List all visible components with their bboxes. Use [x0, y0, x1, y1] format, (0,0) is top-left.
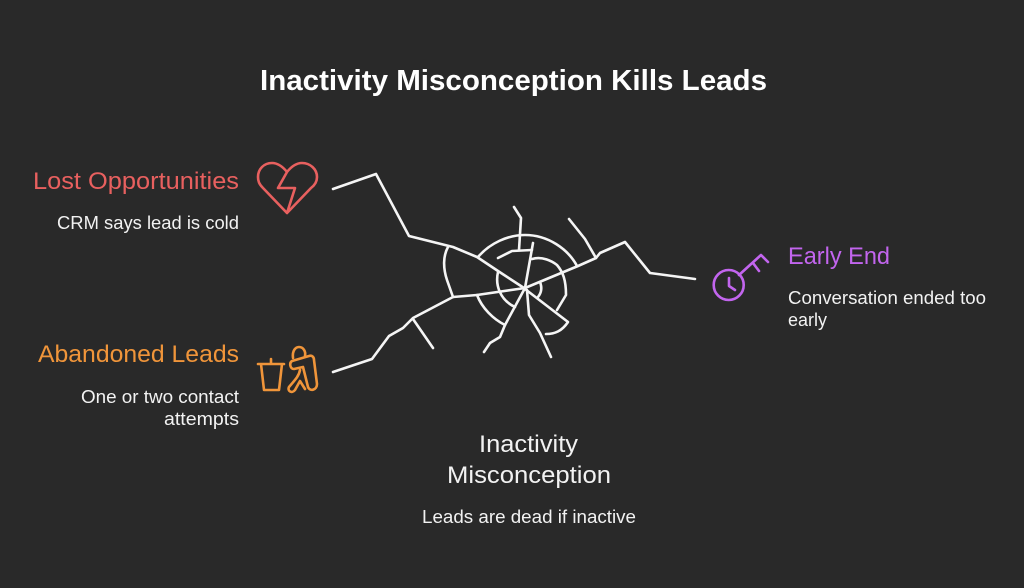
text: conversation ended too early — [788, 288, 986, 330]
panel: abandoned leads — [38, 341, 317, 429]
arcs and spokes — [444, 247, 453, 297]
icon: clock key — [714, 255, 768, 300]
heading: lost opportunities: Lost Opportunities — [33, 168, 239, 195]
chart: shattered glass cracks — [333, 174, 695, 372]
crack to early end — [525, 242, 695, 288]
heading: inactivity misconception — [447, 431, 611, 489]
text: one or two contact attempts: One or two contact — [81, 387, 239, 407]
icon: trash cup and slumped person — [258, 347, 317, 392]
text: conversation ended too early: Conversation ended too — [788, 288, 986, 308]
text: conversation ended too early: early — [788, 310, 827, 330]
heading: early end: Early End — [788, 243, 890, 270]
text: leads are dead if inactive: Leads are dead if inactive — [422, 507, 636, 527]
text: one or two contact attempts: attempts — [164, 409, 239, 429]
title: Inactivity Misconception Kills Leads — [260, 65, 767, 97]
text: crm says lead is cold: CRM says lead is cold — [57, 213, 239, 233]
crack to abandoned leads — [333, 288, 525, 372]
panel: lost opportunities — [33, 163, 317, 233]
icon: broken heart — [258, 163, 317, 213]
crack to lost opportunities — [333, 174, 524, 288]
panel: inactivity misconception — [422, 431, 636, 527]
heading: inactivity misconception: Inactivity — [479, 431, 578, 458]
heading: abandoned leads: Abandoned Leads — [38, 341, 239, 368]
heading: inactivity misconception: Misconception — [447, 462, 611, 489]
panel: early end — [714, 243, 986, 330]
text: one or two contact attempts — [81, 387, 239, 429]
